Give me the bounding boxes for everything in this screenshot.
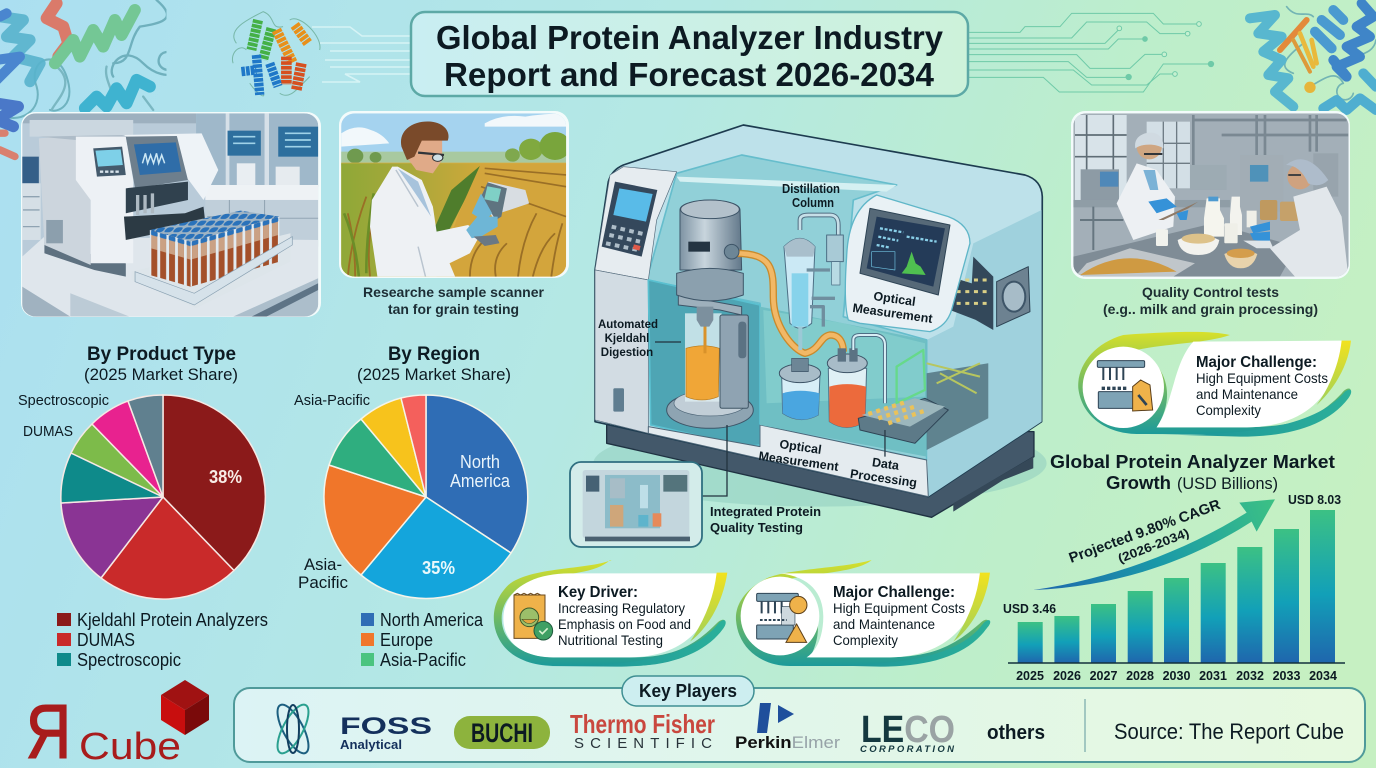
callout: key driver: Key Driver: (558, 584, 638, 601)
bar chart: market growth: USD 8.03 (1288, 493, 1341, 507)
chart title: market growth (1050, 452, 1335, 493)
pie labels: north america (450, 452, 511, 491)
caption: grain scanner: Researche sample scanner (363, 284, 545, 300)
callout: major challenge bottom: High Equipment Costs (833, 600, 965, 616)
panel: key players: others (987, 722, 1045, 744)
label: automated kjeldahl digestion (598, 319, 658, 359)
label: automated kjeldahl digestion: Kjeldahl (605, 333, 649, 345)
caption: grain scanner: tan for grain testing (388, 301, 519, 317)
chart title: market growth: Growth (1106, 473, 1171, 493)
label: automated kjeldahl digestion: Digestion (601, 347, 653, 359)
pie labels: north america: America (450, 471, 511, 491)
callout: major challenge bottom (736, 560, 990, 667)
protein molecule center (232, 12, 320, 96)
pie value: 35%: 35% (422, 558, 455, 578)
legend: product type: DUMAS (77, 630, 135, 650)
chart title: by region (357, 344, 511, 384)
logo: RCube (26, 680, 209, 768)
callout: key driver (494, 560, 727, 667)
legend: product type: Spectroscopic (77, 650, 181, 670)
label: optical measurement on display: Optical (873, 289, 917, 309)
logo: LECO: CORPORATION (860, 744, 955, 755)
legend: product type: Kjeldahl Protein Analyzers (77, 610, 268, 630)
icon: equipment with wrench tag (1097, 361, 1153, 411)
label: data processing: Data (871, 455, 901, 473)
pie labels: product type (18, 393, 109, 440)
label: integrated protein quality testing: Quality Testing (710, 520, 803, 535)
pie labels: region (294, 393, 370, 592)
label: projected cagr: (2026-2034) (1116, 526, 1191, 566)
panel: key players: SCIENTIFIC (574, 735, 712, 752)
bar chart: market growth: 2032 (1236, 669, 1264, 683)
callout: major challenge bottom: Complexity (833, 632, 898, 648)
inset: integrated protein quality testing (570, 425, 727, 547)
label: distillation column (782, 182, 840, 210)
icon: equipment cost warning (757, 593, 807, 642)
label: optical measurement on base (758, 434, 842, 474)
chart title: by product type: (2025 Market Share) (84, 365, 238, 384)
title (411, 12, 968, 96)
logo: LECO: LECO (861, 709, 955, 751)
photo: quality control tests (1071, 111, 1350, 279)
callout: major challenge bottom: and Maintenance (833, 616, 935, 632)
callout: major challenge right: Major Challenge: (1196, 354, 1317, 371)
pie labels: product type: DUMAS (23, 424, 73, 440)
legend: region: Asia-Pacific (380, 650, 466, 670)
legend: product type (57, 610, 268, 670)
callout: key driver: Emphasis on Food and (558, 616, 691, 632)
chart title: market growth: Global Protein Analyzer Market (1050, 452, 1335, 472)
pie labels: region: Pacific (298, 573, 348, 592)
pie labels: region: Asia- (304, 555, 342, 574)
bar chart: market growth: 2031 (1199, 669, 1227, 683)
logo: PerkinElmer (735, 703, 840, 752)
title: Global Protein Analyzer Industry (436, 19, 944, 56)
pie chart: region (324, 395, 528, 598)
label: integrated protein quality testing: Integrated Protein (710, 504, 821, 519)
bar chart: market growth: 2028 (1126, 669, 1154, 683)
legend: region (361, 610, 484, 670)
chart title: by region: By Region (388, 344, 480, 365)
bar chart: market growth: 2033 (1273, 669, 1300, 683)
bar chart: market growth: USD 3.46 (1003, 602, 1056, 616)
circuit lines left of title (312, 27, 410, 82)
label: data processing: Processing (849, 467, 918, 490)
callout: key driver: Increasing Regulatory (558, 600, 685, 616)
bar chart: market growth: 2027 (1090, 669, 1117, 683)
pie value: 38%: 38% (209, 467, 242, 487)
callout line: kjeldahl digestion (655, 341, 681, 343)
panel: key players: BUCHI (471, 718, 533, 748)
callout: major challenge right: Complexity (1196, 402, 1261, 418)
caption: grain scanner (363, 284, 545, 317)
label: optical measurement on base: Measurement (758, 449, 840, 474)
label: optical measurement on base: Optical (779, 437, 823, 457)
callout: major challenge right: and Maintenance (1196, 386, 1298, 402)
panel: key players: Thermo Fisher (570, 709, 715, 739)
pie labels: product type: Spectroscopic (18, 393, 109, 409)
label: integrated protein quality testing (710, 504, 821, 535)
photo: laboratory analyzer with sample tubes (21, 112, 321, 317)
callout: major challenge right (1078, 332, 1351, 437)
callout: key driver: Nutritional Testing (558, 632, 663, 648)
icon: food bag with check (514, 593, 553, 640)
logo: atom (271, 700, 315, 758)
caption: quality control: Quality Control tests (1142, 284, 1279, 300)
label: distillation column: Column (792, 196, 834, 210)
label: data processing (849, 452, 920, 490)
pie chart: product type (61, 395, 265, 599)
panel: key players: Key Players (639, 681, 737, 701)
legend: region: Europe (380, 630, 433, 650)
central cutaway machine illustration (593, 125, 1047, 517)
protein ribbon top left (0, 0, 166, 160)
panel: key players (234, 676, 1365, 762)
chart title: market growth: (USD Billions) (1177, 475, 1278, 493)
chart title: by region: (2025 Market Share) (357, 365, 511, 384)
panel: key players: Analytical (340, 737, 402, 752)
title: Report and Forecast 2026-2034 (444, 56, 935, 93)
callout: major challenge bottom: Major Challenge: (833, 584, 955, 601)
bar chart: market growth: 2026 (1053, 669, 1081, 683)
bar chart: market growth: 2025 (1016, 669, 1044, 683)
chart title: by product type (84, 344, 238, 384)
label: optical measurement on display (852, 286, 936, 326)
photo: researcher scanning grain in field (339, 111, 571, 278)
pie labels: region: Asia-Pacific (294, 393, 370, 409)
bar chart: market growth: 2030 (1163, 669, 1190, 683)
protein ribbon top right (1250, 3, 1376, 110)
bar chart: market growth: 2034 (1309, 669, 1337, 683)
callout: major challenge right: High Equipment Costs (1196, 370, 1328, 386)
label: optical measurement on display: Measurement (852, 301, 934, 326)
panel: key players: FOSS (340, 713, 432, 740)
logo: RCube: Cube (79, 726, 181, 768)
legend: region: North America (380, 610, 484, 630)
caption: quality control: (e.g.. milk and grain processing) (1103, 301, 1318, 317)
bar chart: market growth (1003, 493, 1345, 683)
circuit lines right of title (968, 13, 1214, 92)
panel: key players: Source: The Report Cube (1114, 719, 1344, 744)
growth arrow (1033, 499, 1275, 590)
label: automated kjeldahl digestion: Automated (598, 319, 658, 331)
pie labels: north america: North (460, 452, 500, 472)
label: projected cagr: Projected 9.80% CAGR (1067, 497, 1223, 567)
logo: PerkinElmer: Perkin Elmer (735, 733, 840, 752)
chart title: by product type: By Product Type (87, 344, 236, 365)
caption: quality control (1103, 284, 1318, 317)
label: distillation column: Distillation (782, 182, 840, 196)
